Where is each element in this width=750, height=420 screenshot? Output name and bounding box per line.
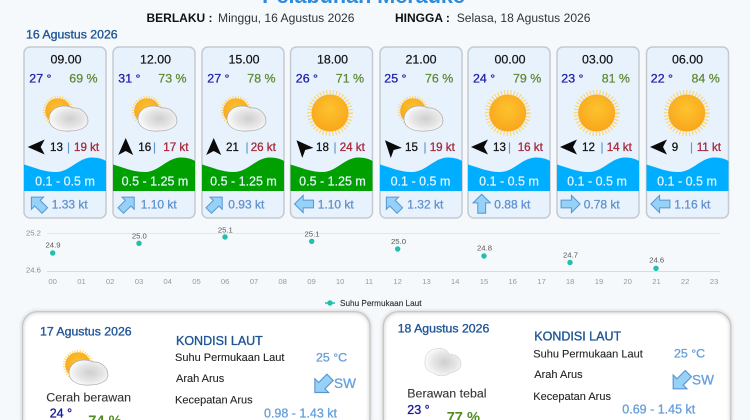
- chart: sea surface temperature: 23: [710, 277, 718, 286]
- panel: forecast 06.00: |: [690, 141, 693, 154]
- panel: forecast 09.00: 27 °: [29, 72, 52, 86]
- chart: sea surface temperature: 01: [77, 277, 86, 286]
- sea conditions: Suhu Permukaan Laut: [533, 348, 643, 360]
- panel: forecast 00.00: 16 kt: [518, 141, 544, 154]
- panel: forecast 09.00: 69 %: [69, 72, 98, 86]
- chart: sea surface temperature: 03: [135, 277, 143, 286]
- panel: forecast 12.00: 17 kt: [163, 141, 189, 154]
- panel: forecast 12.00: 12.00: [140, 52, 171, 66]
- panel: forecast 06.00: 1.16 kt: [674, 198, 711, 212]
- chart: sea surface temperature: 24.7: [563, 250, 578, 259]
- panel: forecast 06.00: 11 kt: [697, 141, 722, 154]
- panel: forecast 03.00: 23 °: [561, 72, 584, 86]
- panel: forecast 03.00: 0.1 - 0.5 m: [567, 175, 627, 189]
- sea conditions: 25 °C: [316, 351, 347, 365]
- temperature: 23 °: [407, 403, 430, 417]
- panel: forecast 15.00: |: [246, 141, 249, 154]
- chart: sea surface temperature: 14: [451, 277, 460, 286]
- panel: forecast 12.00: 1.10 kt: [141, 198, 177, 212]
- chart: sea surface temperature: 18: [566, 277, 574, 286]
- chart: sea surface temperature: 25.1: [218, 226, 233, 235]
- sea conditions: Kecepatan Arus: [533, 391, 611, 403]
- panel: forecast 09.00: [24, 47, 106, 218]
- panel: forecast 12.00: 16: [138, 141, 151, 154]
- panel: forecast 15.00: 78 %: [247, 72, 276, 86]
- chart: sea surface temperature: 24.6: [649, 256, 664, 265]
- panel: forecast 09.00: 19 kt: [74, 141, 100, 154]
- panel: forecast 18.00: 18: [316, 141, 329, 154]
- chart: sea surface temperature: 16: [508, 277, 517, 286]
- panel: forecast 21.00: [379, 47, 462, 218]
- panel: forecast 18.00: 18.00: [317, 52, 348, 66]
- chart: sea surface temperature: 09: [307, 277, 316, 286]
- panel: forecast 00.00: 24 °: [473, 72, 495, 86]
- validity period: HINGGA :: [395, 11, 450, 25]
- panel: forecast 03.00: 12: [582, 141, 595, 154]
- chart: sea surface temperature: [26, 226, 720, 286]
- chart: sea surface temperature: 25.0: [132, 232, 147, 241]
- panel: forecast 09.00: |: [67, 141, 70, 154]
- chart: sea surface temperature: 22: [681, 277, 689, 286]
- sea conditions: Arah Arus: [534, 369, 583, 381]
- validity period: [146, 11, 591, 25]
- panel: forecast 18.00: 1.10 kt: [318, 198, 354, 212]
- condition: Berawan tebal: [407, 387, 487, 401]
- condition: Cerah berawan: [46, 391, 131, 405]
- date: 18 Agustus 2026: [398, 321, 489, 335]
- panel: forecast 15.00: 21: [226, 141, 239, 154]
- chart: sea surface temperature: 24.6: [26, 266, 41, 275]
- panel: forecast 12.00: |: [153, 141, 156, 154]
- panel: forecast 06.00: 0.1 - 0.5 m: [657, 175, 717, 189]
- chart: sea surface temperature: 10: [336, 277, 344, 286]
- panel: forecast 21.00: 0.1 - 0.5 m: [391, 175, 450, 189]
- panel: forecast 21.00: 21.00: [405, 52, 437, 66]
- panel: forecast 12.00: 73 %: [158, 72, 187, 86]
- sea conditions: KONDISI LAUT: [176, 334, 263, 348]
- sea conditions: Suhu Permukaan Laut: [175, 352, 284, 364]
- panel: forecast 06.00: [646, 47, 728, 218]
- chart: sea surface temperature: 02: [106, 277, 114, 286]
- panel: forecast 09.00: 0.1 - 0.5 m: [35, 175, 95, 189]
- panel: forecast 12.00: [113, 47, 195, 218]
- panel: forecast 21.00: 25 °: [384, 72, 407, 86]
- chart: sea surface temperature: 11: [365, 277, 373, 286]
- panel: 17 Agustus 2026: [22, 312, 370, 420]
- panel: forecast 21.00: 15: [405, 141, 418, 154]
- panel: forecast 00.00: [468, 47, 550, 218]
- panel: forecast 18.00: [290, 47, 372, 218]
- chart: sea surface temperature: 20: [623, 277, 632, 286]
- panel: forecast 03.00: 0.78 kt: [584, 198, 620, 212]
- panel: forecast 15.00: [202, 47, 284, 218]
- date: 17 Agustus 2026: [40, 325, 132, 339]
- panel: forecast 03.00: |: [600, 141, 604, 154]
- chart: sea surface temperature: 24.9: [46, 240, 60, 249]
- panel: forecast 09.00: 13: [50, 141, 63, 154]
- date heading: 16 Agustus 2026: [26, 28, 118, 42]
- chart: sea surface temperature: 25.2: [26, 229, 41, 238]
- panel: forecast 03.00: 03.00: [582, 52, 613, 66]
- sea conditions: 0.98 - 1.43 kt: [264, 406, 337, 420]
- sea conditions: [533, 330, 714, 416]
- sea conditions: KONDISI LAUT: [534, 330, 621, 344]
- sea conditions: 0.69 - 1.45 kt: [622, 402, 696, 416]
- panel: forecast 18.00: 26 °: [296, 72, 318, 86]
- panel: 18 Agustus 2026: [383, 312, 731, 420]
- chart: sea surface temperature: 04: [163, 277, 173, 286]
- panel: forecast 15.00: 26 kt: [251, 141, 277, 154]
- panel: forecast 12.00: 0.5 - 1.25 m: [122, 175, 188, 189]
- sea conditions: SW: [692, 372, 714, 387]
- chart: sea surface temperature: 21: [652, 277, 661, 286]
- chart: sea surface temperature: 12: [393, 277, 402, 286]
- chart: sea surface temperature: 08: [278, 277, 287, 286]
- panel: forecast 06.00: 06.00: [672, 52, 703, 66]
- panel: forecast 00.00: 13: [493, 141, 506, 154]
- panel: forecast 03.00: [557, 47, 639, 218]
- chart: sea surface temperature: 19: [595, 277, 603, 286]
- panel: forecast 00.00: 0.88 kt: [494, 198, 531, 212]
- chart: sea surface temperature: 25.0: [391, 237, 406, 246]
- chart: sea surface temperature: 00: [48, 277, 57, 286]
- panel: forecast 00.00: 79 %: [513, 72, 541, 86]
- panel: forecast 09.00: 1.33 kt: [52, 198, 88, 212]
- chart: sea surface temperature: 24.8: [477, 244, 492, 253]
- chart: sea surface temperature: 06: [221, 277, 229, 286]
- sea conditions: Arah Arus: [176, 373, 225, 385]
- panel: forecast 18.00: 24 kt: [340, 141, 366, 154]
- chart: sea surface temperature: 07: [250, 277, 258, 286]
- panel: forecast 18.00: 71 %: [336, 72, 364, 86]
- panel: forecast 18.00: 0.5 - 1.25 m: [299, 175, 366, 189]
- panel: forecast 00.00: 00.00: [494, 52, 526, 66]
- panel: forecast 06.00: 84 %: [692, 72, 720, 86]
- panel: forecast 18.00: |: [334, 141, 337, 154]
- sea conditions: [175, 334, 356, 420]
- validity period: Minggu, 16 Agustus 2026: [218, 11, 355, 25]
- panel: forecast 21.00: |: [424, 141, 427, 154]
- panel: forecast 15.00: 0.93 kt: [228, 198, 265, 212]
- panel: forecast 06.00: 22 °: [651, 72, 673, 86]
- sea conditions: 25 °C: [674, 347, 705, 361]
- panel: forecast 09.00: 09.00: [50, 52, 82, 66]
- sea conditions: Kecepatan Arus: [175, 394, 253, 406]
- panel: forecast 03.00: 81 %: [602, 72, 630, 86]
- icon: overcast cloud: [425, 348, 461, 376]
- panel: forecast 00.00: 0.1 - 0.5 m: [479, 175, 539, 189]
- panel: forecast 03.00: 14 kt: [607, 141, 633, 154]
- chart: sea surface temperature: 13: [422, 277, 431, 286]
- chart: sea surface temperature: 05: [192, 277, 201, 286]
- panel: forecast 15.00: 15.00: [228, 52, 260, 66]
- chart legend: Suhu Permukaan Laut: [340, 299, 422, 308]
- validity period: BERLAKU :: [146, 11, 212, 25]
- temperature: 24 °: [50, 406, 72, 420]
- icon: partly cloudy: [64, 351, 108, 385]
- sea conditions: SW: [334, 376, 356, 391]
- validity period: Selasa, 18 Agustus 2026: [457, 11, 591, 25]
- chart: sea surface temperature: 15: [480, 277, 488, 286]
- panel: forecast 00.00: |: [508, 141, 511, 154]
- panel: forecast 12.00: 31 °: [118, 72, 141, 86]
- panel: forecast 15.00: 27 °: [207, 72, 230, 86]
- chart: sea surface temperature: 25.1: [305, 230, 319, 239]
- panel: forecast 21.00: 76 %: [425, 72, 453, 86]
- panel: forecast 15.00: 0.5 - 1.25 m: [210, 175, 277, 189]
- panel: forecast 06.00: 9: [672, 141, 678, 154]
- panel: forecast 21.00: 1.32 kt: [407, 198, 444, 212]
- panel: forecast 21.00: 19 kt: [430, 141, 456, 154]
- chart: sea surface temperature: 17: [537, 277, 546, 286]
